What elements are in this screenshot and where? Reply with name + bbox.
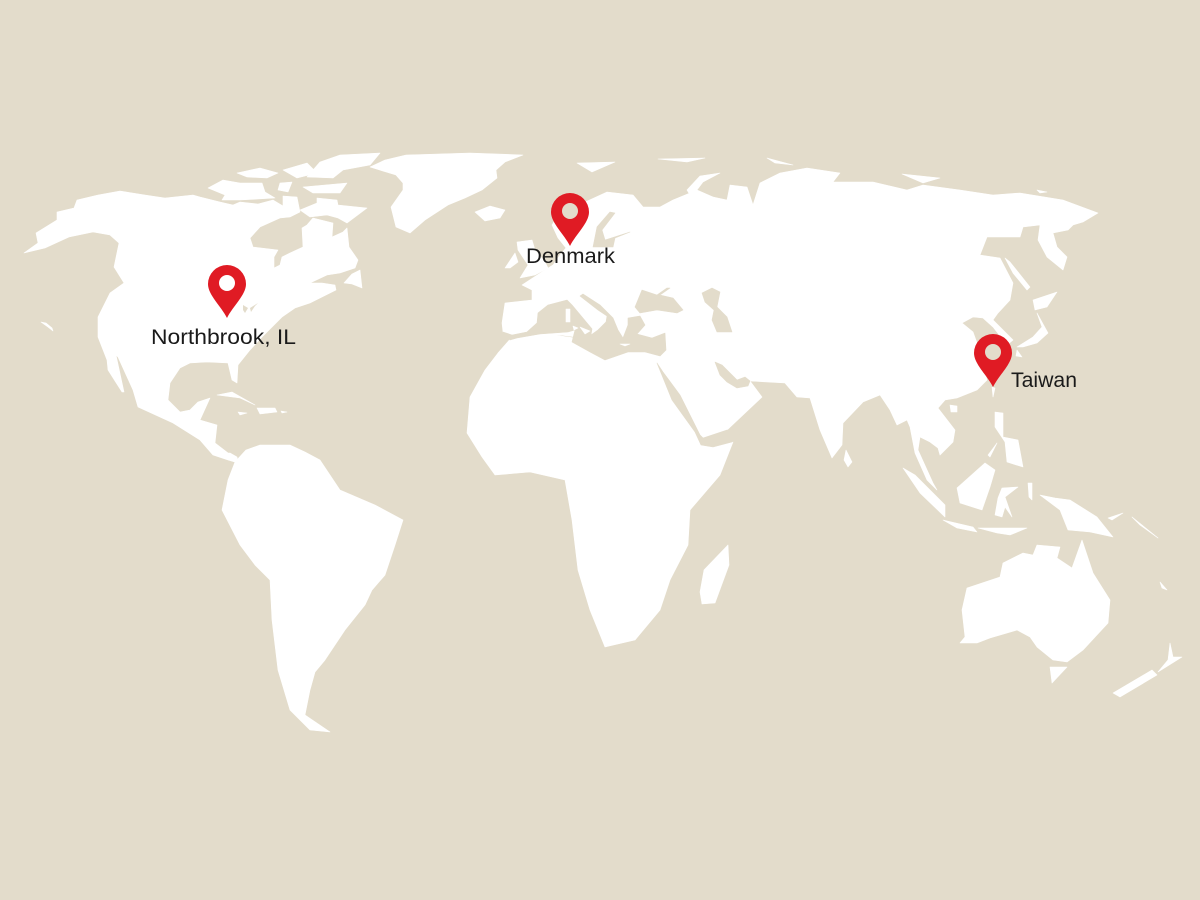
New Zealand — [1113, 643, 1182, 697]
Africa — [467, 333, 733, 647]
Persian Gulf — [715, 362, 750, 388]
Madagascar — [700, 545, 729, 604]
Japan and Sakhalin — [1005, 258, 1057, 357]
Mediterranean islands — [566, 309, 630, 346]
Sri Lanka — [844, 450, 852, 467]
Black Sea — [635, 288, 683, 313]
Hawaii — [41, 322, 53, 331]
Iceland — [475, 206, 505, 221]
Britain and Ireland — [505, 240, 548, 278]
South America — [222, 445, 403, 732]
label: Taiwan: Taiwan — [1011, 369, 1077, 392]
pin: Denmark — [551, 193, 589, 246]
Caspian Sea — [702, 288, 732, 332]
Taiwan — [992, 387, 995, 397]
Arctic Russian islands — [577, 158, 1047, 197]
Southeast Asia islands — [903, 405, 1167, 590]
Eurasia — [502, 168, 1098, 490]
Arctic islands — [208, 153, 380, 288]
pin: Northbrook — [208, 265, 246, 318]
pin: Taiwan — [974, 334, 1012, 387]
Mediterranean and Red Sea cutouts — [503, 212, 750, 447]
Tasmania — [1050, 667, 1067, 683]
Baltic Sea — [593, 212, 630, 247]
North America — [24, 191, 358, 463]
label: Denmark: Denmark — [526, 245, 616, 268]
Australia — [960, 540, 1110, 662]
label: Northbrook, IL: Northbrook, IL — [151, 326, 296, 349]
Greenland — [370, 153, 523, 233]
Great Lakes — [243, 303, 258, 313]
Caribbean — [217, 392, 287, 415]
world map — [24, 153, 1182, 732]
